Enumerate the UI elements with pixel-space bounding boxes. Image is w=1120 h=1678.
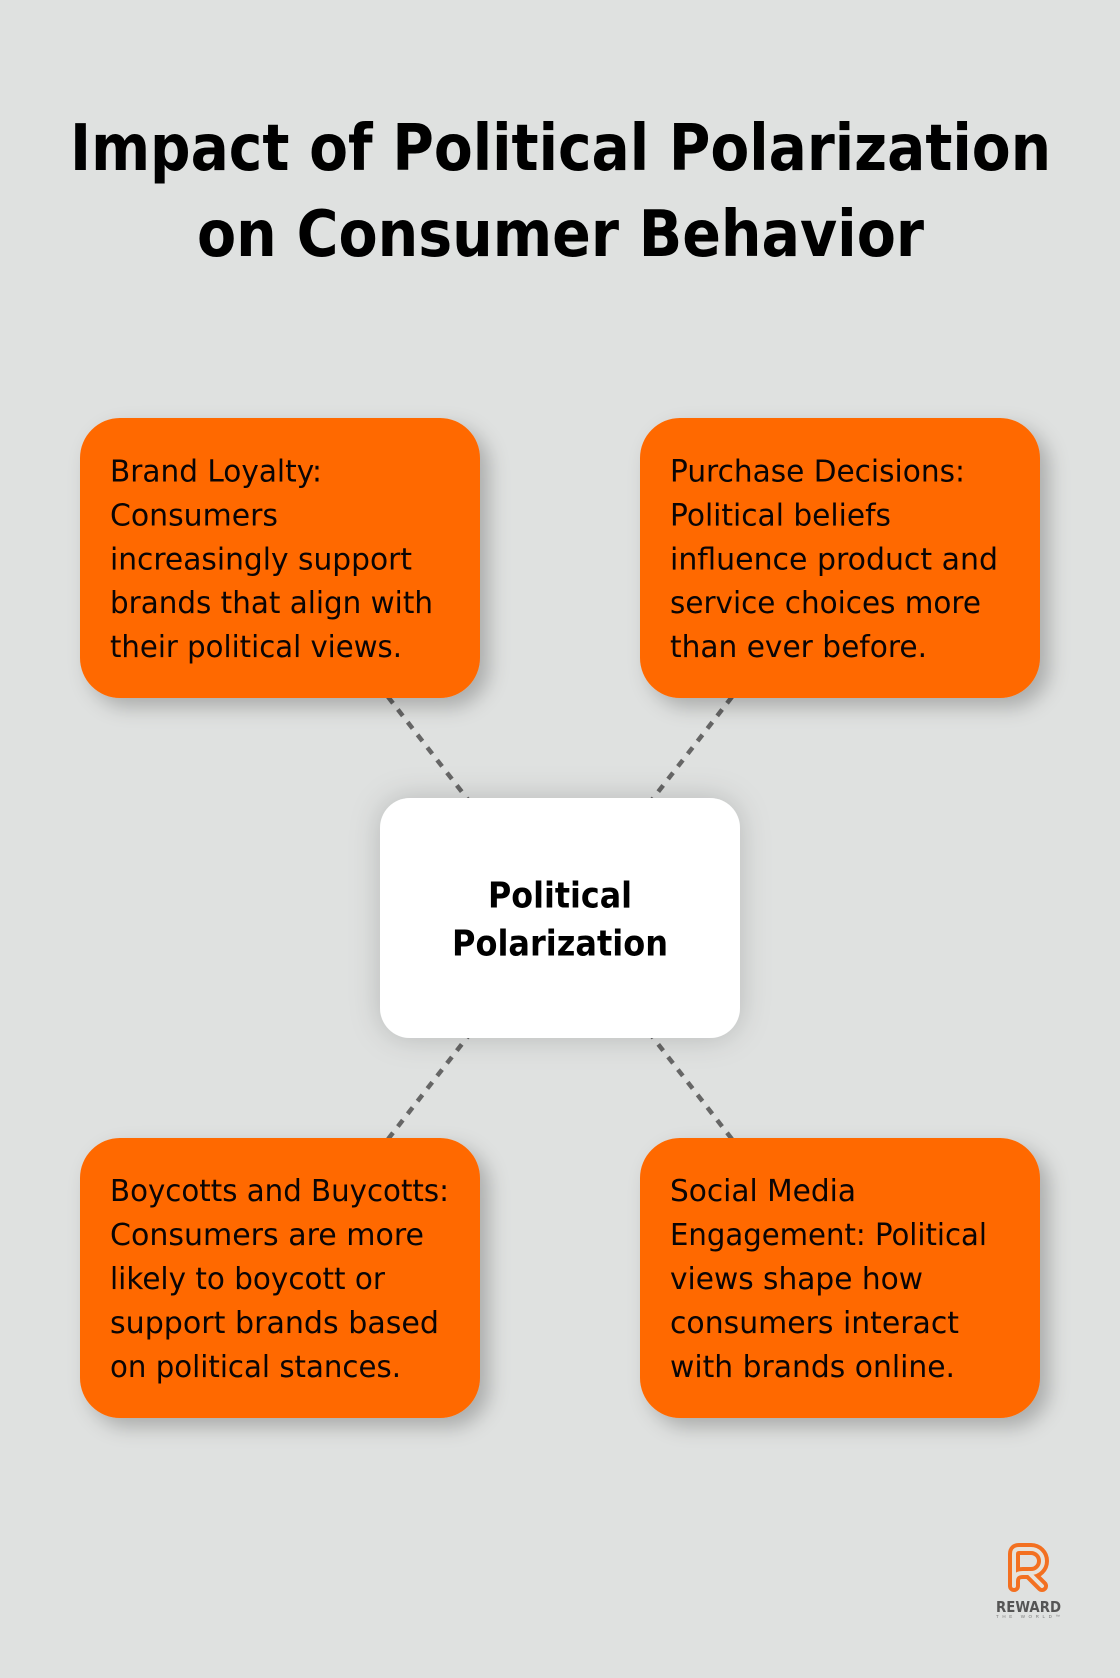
panel: Brand Loyalty: Consumers xyxy=(110,498,278,534)
panel: Boycotts and Buycotts: support brands based xyxy=(110,1306,439,1341)
panel: Purchase Decisions: service choices more xyxy=(670,586,981,621)
panel: Brand Loyalty: increasingly support xyxy=(110,542,412,578)
panel: Social Media Engagement: Social Media xyxy=(670,1174,856,1209)
panel: Social Media Engagement: Engagement: Political xyxy=(670,1218,987,1253)
panel: Political Polarization center: Political xyxy=(488,876,632,916)
panel: Political Polarization center: Polarization xyxy=(452,924,668,964)
panel: Purchase Decisions xyxy=(640,418,1040,698)
panel: Boycotts and Buycotts xyxy=(80,1138,480,1418)
panel: Purchase Decisions: Political beliefs xyxy=(670,498,891,534)
panel: Boycotts and Buycotts: Consumers are more xyxy=(110,1218,424,1253)
panel: Purchase Decisions: influence product and xyxy=(670,542,998,578)
panel: Brand Loyalty xyxy=(80,418,480,698)
panel: Purchase Decisions: than ever before. xyxy=(670,630,927,665)
connector: Brand Loyalty to center xyxy=(280,558,560,918)
title: on Consumer Behavior xyxy=(197,198,924,272)
panel: Boycotts and Buycotts: on political stances. xyxy=(110,1350,401,1385)
panel: Political Polarization center xyxy=(380,798,740,1038)
panel: Boycotts and Buycotts: likely to boycott or xyxy=(110,1262,385,1297)
connector: Social Media Engagement to center xyxy=(560,918,840,1278)
panel: Purchase Decisions: Purchase Decisions: xyxy=(670,454,965,490)
logo: Reward the World xyxy=(996,1549,1061,1619)
panel: Brand Loyalty: brands that align with xyxy=(110,586,433,621)
panel: Social Media Engagement: views shape how xyxy=(670,1262,923,1297)
panel: Social Media Engagement: with brands online. xyxy=(670,1350,955,1385)
panel: Social Media Engagement: consumers interact xyxy=(670,1306,959,1341)
panel: Boycotts and Buycotts: Boycotts and Buycotts: xyxy=(110,1174,449,1209)
title xyxy=(70,112,1051,272)
logo: Reward the World: THE WORLD™ xyxy=(996,1614,1060,1619)
connector: Boycotts and Buycotts to center xyxy=(280,918,560,1278)
logo: Reward the World: REWARD xyxy=(996,1598,1061,1616)
connector: Purchase Decisions to center xyxy=(560,558,840,918)
panel: Brand Loyalty: their political views. xyxy=(110,630,402,665)
panel: Brand Loyalty: Brand Loyalty: xyxy=(110,454,322,490)
panel: Social Media Engagement xyxy=(640,1138,1040,1418)
